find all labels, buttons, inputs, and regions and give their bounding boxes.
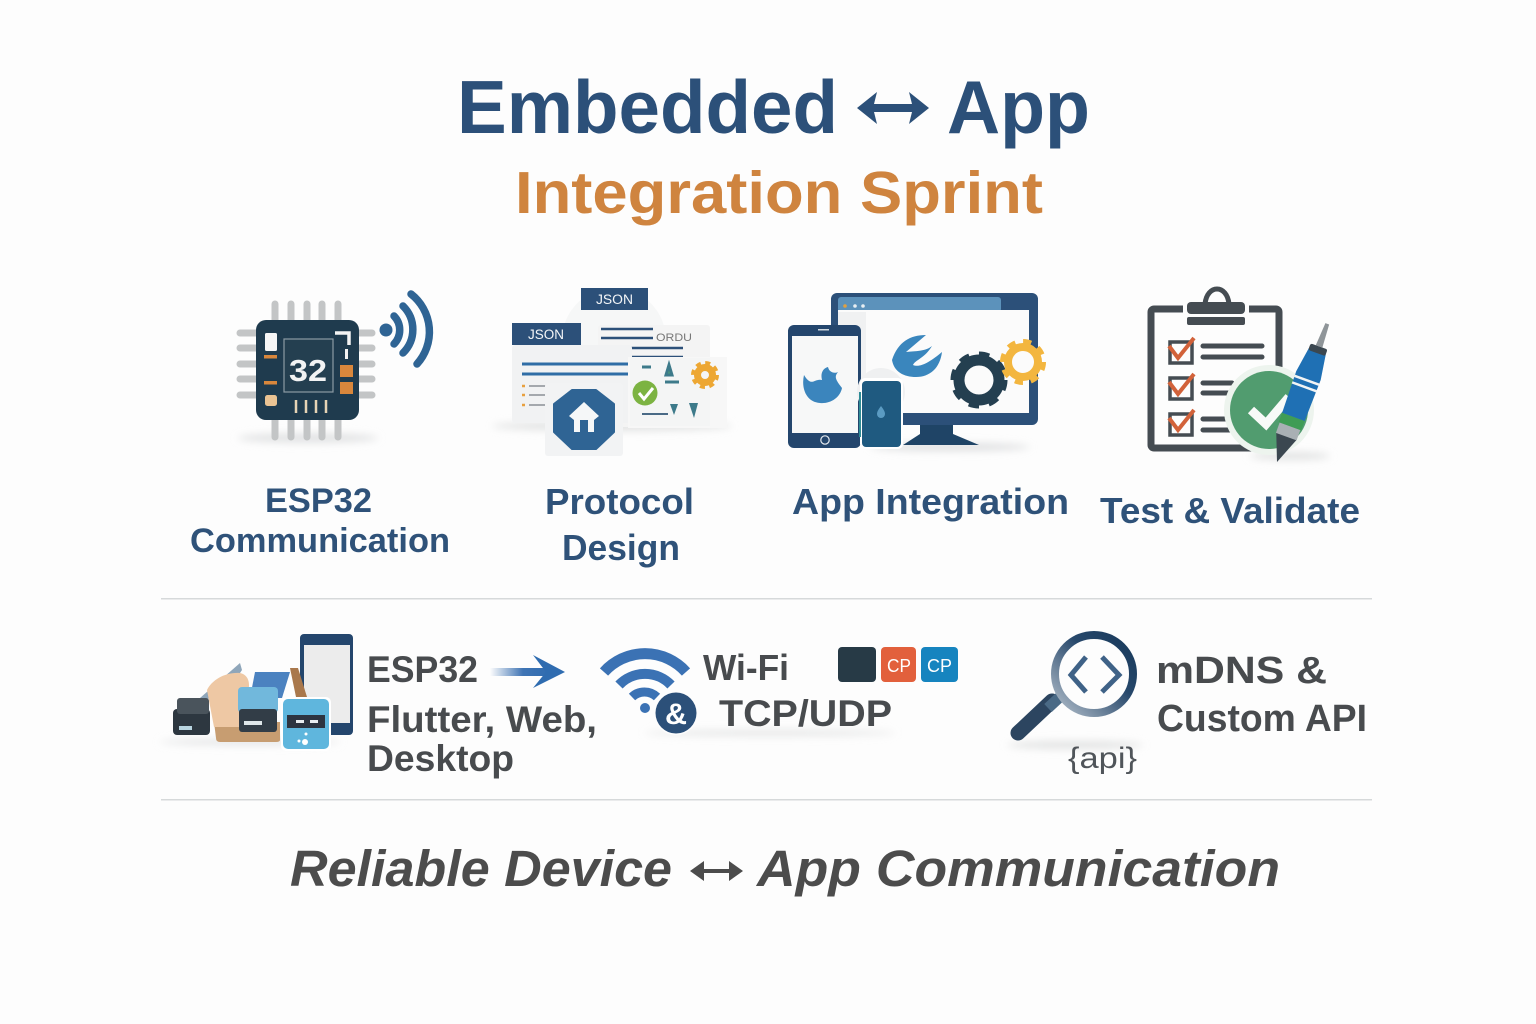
text: mDNS & Custom API: Custom API xyxy=(1157,698,1367,740)
label: ESP32 Communication: Communication xyxy=(190,522,450,560)
icon: devices, hand and mobile phone xyxy=(160,634,353,751)
panel: mDNS and custom API xyxy=(1007,635,1367,775)
panel: devices and platforms xyxy=(160,634,597,779)
text: ESP32: ESP32 xyxy=(367,649,478,690)
title line: Embedded ↔ App xyxy=(457,65,1090,149)
icon: Wi-Fi with ampersand badge: & xyxy=(665,698,687,731)
label: ESP32 Communication xyxy=(190,482,450,560)
footer tagline: App Communication xyxy=(755,840,1280,897)
text: Flutter, Web, Desktop: Desktop xyxy=(367,738,514,779)
icon: title double arrow xyxy=(857,92,929,124)
text: Flutter, Web, Desktop: Flutter, Web, xyxy=(367,699,597,740)
icon: JSON documents with shield badge: JSON xyxy=(596,292,633,307)
icon: JSON documents with shield badge: JSON xyxy=(528,327,564,342)
label: Protocol Design: Design xyxy=(562,527,680,568)
panel: Wi-Fi and TCP/UDP xyxy=(604,647,958,736)
icon: ESP32 chip with wireless waves: 32 xyxy=(289,353,327,388)
arrow: ESP32 to Wi-Fi xyxy=(490,655,565,688)
icon: JSON documents with shield badge xyxy=(492,288,732,456)
label: Protocol Design: Protocol xyxy=(545,481,694,522)
label: Protocol Design xyxy=(545,481,694,568)
text: mDNS & Custom API: mDNS & xyxy=(1156,650,1327,692)
text: Wi-Fi: Wi-Fi xyxy=(703,647,789,688)
footer tagline xyxy=(290,840,1280,897)
icon: ESP32 chip with wireless waves xyxy=(238,294,429,443)
footer tagline: Reliable Device xyxy=(290,840,672,897)
label: Test & Validate: Test & Validate xyxy=(1100,490,1360,531)
icon: protocol chips: CP xyxy=(887,656,911,676)
label: App Integration: App Integration xyxy=(792,481,1069,522)
label: ESP32 Communication: ESP32 xyxy=(265,482,372,520)
icon: checklist clipboard with check and probe xyxy=(1151,289,1339,466)
subtitle: Integration Sprint xyxy=(515,160,1043,226)
text: {api}: {api} xyxy=(1068,742,1137,775)
text: TCP/UDP: TCP/UDP xyxy=(719,693,892,734)
icon: footer double arrow xyxy=(690,861,743,881)
panel: protocol design xyxy=(492,288,732,568)
text: Flutter, Web, Desktop xyxy=(367,699,597,779)
title xyxy=(457,65,1090,226)
divider xyxy=(161,598,1372,600)
panel: test and validate xyxy=(1100,289,1360,531)
text: mDNS & Custom API xyxy=(1156,650,1367,740)
icon: protocol chips xyxy=(838,647,958,682)
icon: protocol chips: CP xyxy=(927,656,952,676)
panel: ESP32 communication xyxy=(190,294,450,560)
icon: Wi-Fi with ampersand badge xyxy=(604,654,895,736)
icon: tablet, phone and monitor with gears xyxy=(788,293,1043,451)
title line: Embedded ↔ App: App xyxy=(947,65,1090,149)
icon: magnifier with code brackets xyxy=(1007,635,1143,749)
icon: JSON documents with shield badge: ORDU xyxy=(656,332,692,344)
divider xyxy=(161,799,1372,800)
panel: app integration xyxy=(788,293,1069,522)
title line: Embedded ↔ App: Embedded xyxy=(457,65,838,149)
